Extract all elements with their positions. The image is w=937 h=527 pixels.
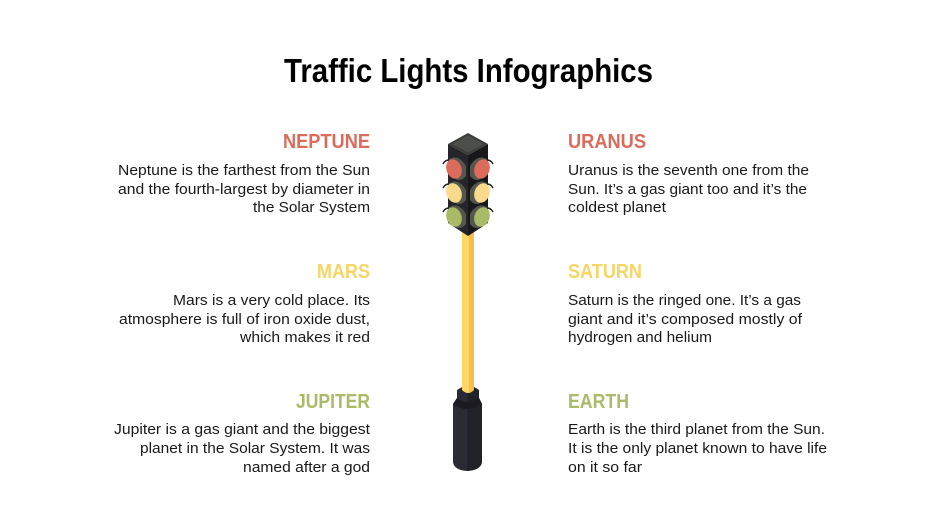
panel: Jupiter: JUPITER (296, 391, 370, 413)
right lamps (470, 157, 493, 229)
panel: Saturn: giant and it’s composed mostly of (568, 311, 803, 328)
panel: Mars (119, 261, 370, 346)
panel: Neptune: the Solar System (253, 199, 370, 216)
panel: Uranus: Uranus is the seventh one from the (568, 162, 809, 179)
panel: Jupiter (114, 391, 371, 476)
panel: Mars: which makes it red (239, 329, 370, 346)
panel: Uranus: coldest planet (568, 199, 667, 216)
traffic light illustration (443, 133, 493, 471)
panel: Mars: atmosphere is full of iron oxide dust, (119, 311, 370, 328)
panel: Earth: on it so far (568, 459, 642, 476)
panel: Uranus: URANUS (568, 131, 646, 153)
title: Traffic Lights Infographics (284, 52, 653, 89)
panel: Neptune: Neptune is the farthest from the Sun (118, 162, 370, 179)
panel: Neptune: NEPTUNE (283, 131, 370, 153)
panel: Saturn: SATURN (568, 261, 642, 283)
panel: Earth: Earth is the third planet from the Sun. (568, 421, 825, 438)
panel: Earth (568, 391, 827, 476)
base (453, 387, 482, 471)
panel: Mars: Mars is a very cold place. Its (173, 292, 370, 309)
panel: Saturn: Saturn is the ringed one. It’s a gas (568, 292, 801, 309)
panel: Uranus: Sun. It’s a gas giant too and it’s the (568, 181, 807, 198)
panel: Jupiter: named after a god (243, 459, 370, 476)
left lamps (443, 157, 466, 229)
panel: Earth: EARTH (568, 391, 629, 413)
cap (448, 133, 488, 155)
signal head (443, 133, 493, 236)
panel: Uranus (568, 131, 809, 216)
panel: Neptune: and the fourth-largest by diameter in (118, 181, 370, 198)
panel: Jupiter: planet in the Solar System. It was (140, 440, 370, 457)
panel: Neptune (118, 131, 370, 216)
panel: Earth: It is the only planet known to have life (568, 440, 827, 457)
panel: Saturn (568, 261, 803, 346)
pole (462, 232, 474, 393)
panel: Jupiter: Jupiter is a gas giant and the biggest (114, 421, 371, 438)
panel: Saturn: hydrogen and helium (568, 329, 712, 346)
panel: Mars: MARS (317, 261, 370, 283)
